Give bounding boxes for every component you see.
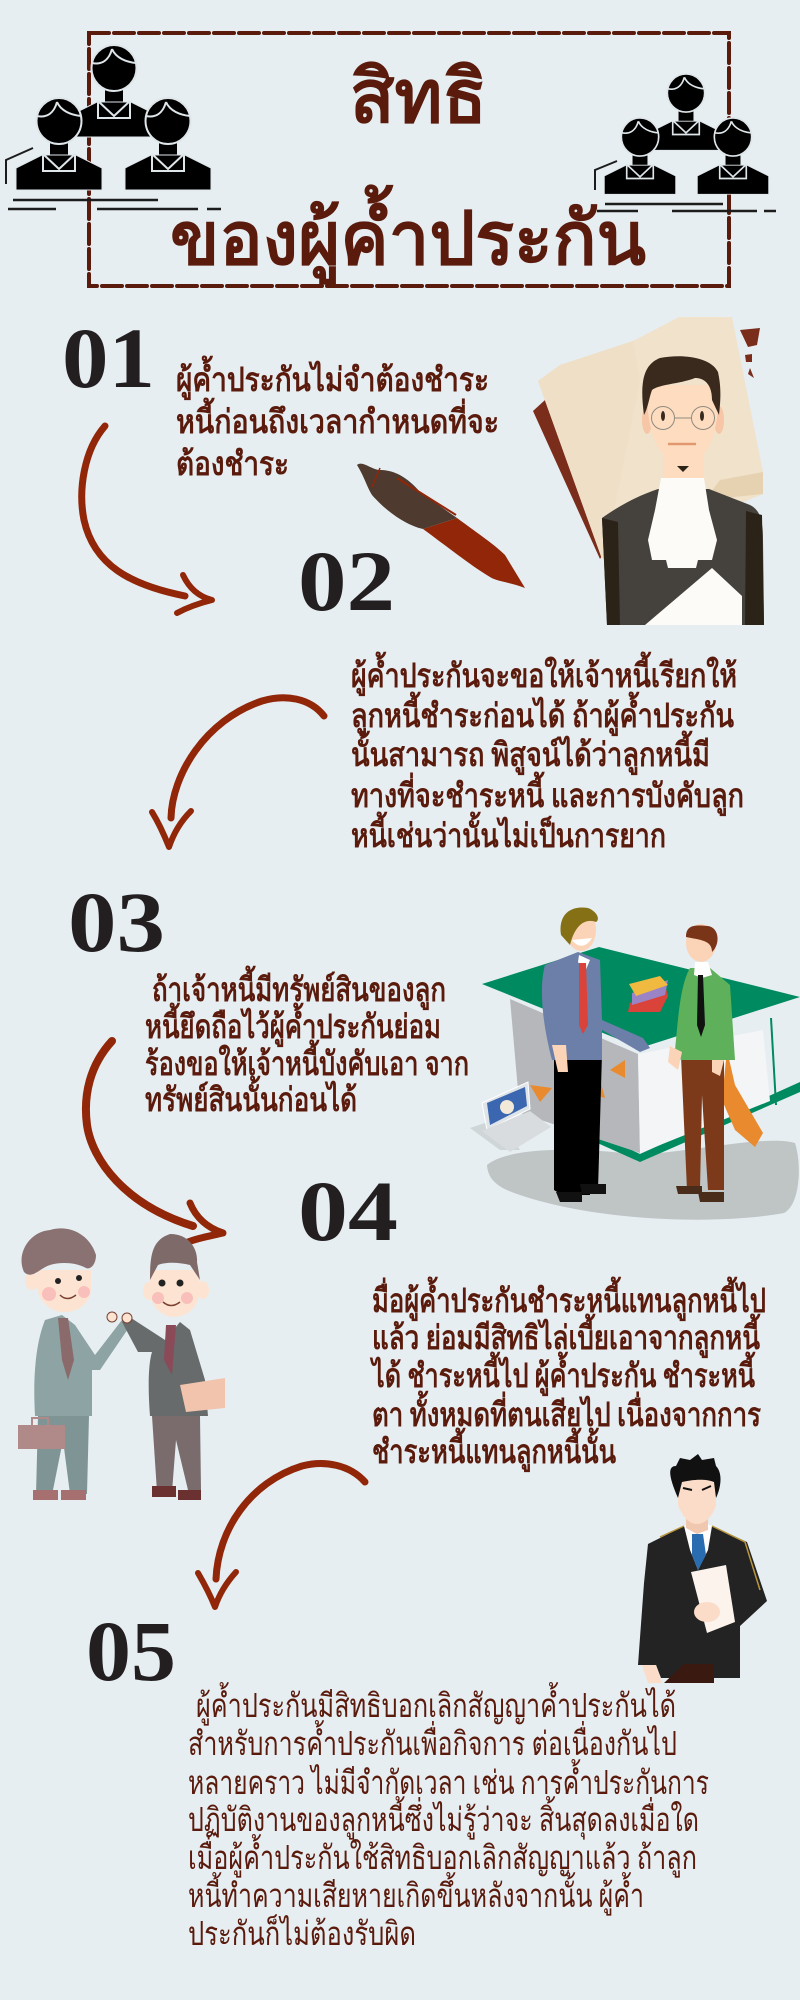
arrow 2: [152, 698, 324, 847]
text: point 4: ชำระหนี้แทนลูกหนี้นั้น: [372, 1427, 616, 1473]
text: point 2: [351, 651, 744, 855]
text: point 3: หนี้ยึดถือไว้ผู้ค้ำประกันย่อม: [145, 1002, 441, 1048]
text: point 1: [176, 355, 499, 483]
illustration: lawyer with open book: [533, 317, 764, 625]
title: ของผู้ค้ำประกัน: [170, 184, 646, 285]
text: point 5: [188, 1682, 709, 1953]
text: point 3: [145, 965, 469, 1119]
text: point 3: ทรัพย์สินนั้นก่อนได้: [145, 1075, 357, 1119]
arrow 4: [198, 1464, 365, 1607]
arrow 1: [82, 426, 212, 613]
text: point 1: ผู้ค้ำประกันไม่จำต้องชำระ: [176, 355, 489, 401]
number 04: 04: [298, 1163, 398, 1259]
illustration: two businessmen greeting: [18, 1228, 225, 1500]
illustration: pen: [357, 464, 525, 588]
illustration: businessman holding document: [638, 1454, 767, 1683]
number 03: 03: [68, 874, 165, 970]
text: point 2: หนี้เช่นว่านั้นไม่เป็นการยาก: [351, 811, 666, 855]
title: [170, 57, 646, 285]
text: point 4: [370, 1276, 766, 1473]
arrow 3: [86, 1041, 223, 1242]
illustration: two graduates with book and cap: [470, 907, 800, 1220]
text: point 5: หนี้ทำความเสียหายเกิดขึ้นหลังจากนั้น ผู้ค้ำ: [188, 1872, 644, 1916]
dashed title frame: [89, 33, 729, 286]
icon: group of three people, right: [595, 74, 776, 211]
text: point 3: ถ้าเจ้าหนี้มีทรัพย์สินของลูก: [152, 965, 446, 1011]
text: point 2: นั้นสามารถ พิสูจน์ได้ว่าลูกหนี้มี: [351, 730, 710, 776]
text: point 1: ต้องชำระ: [176, 447, 289, 483]
title: สิทธิ: [350, 57, 487, 139]
number 05: 05: [86, 1603, 176, 1699]
number 02: 02: [298, 533, 395, 629]
text: point 1: หนี้ก่อนถึงเวลากำหนดที่จะ: [176, 397, 499, 441]
text: point 3: ร้องขอให้เจ้าหนี้บังคับเอา จาก: [145, 1039, 469, 1083]
number 01: 01: [62, 310, 155, 406]
icon: group of three people, left: [6, 45, 221, 209]
text: point 5: ประกันก็ไม่ต้องรับผิด: [188, 1914, 416, 1953]
